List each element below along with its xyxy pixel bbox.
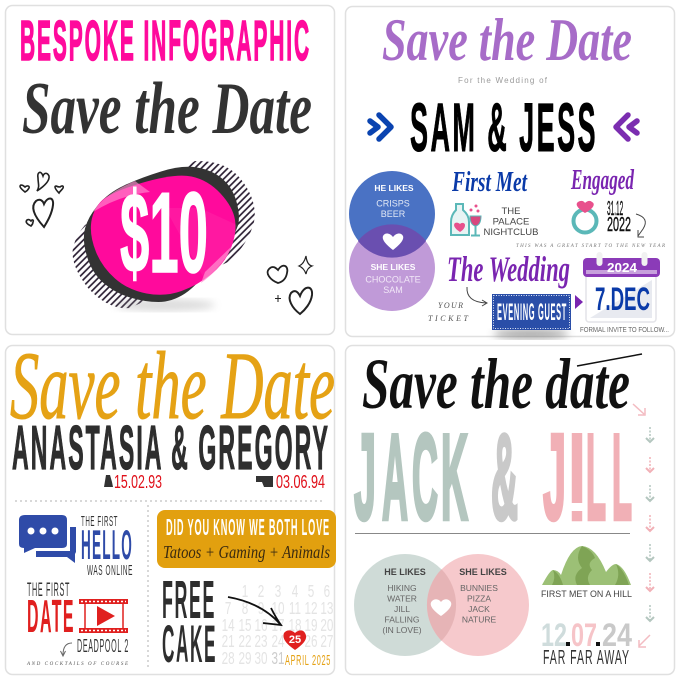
text: first met on a hill: FIRST MET ON A HILL: [541, 589, 632, 599]
icon: hills: [542, 546, 631, 585]
list: he likes: JILL: [394, 604, 410, 614]
label: he likes: HE LIKES: [384, 567, 426, 577]
calendar numbers: 21: [222, 632, 235, 652]
arrow: note: [636, 214, 645, 237]
text: engagement date: 2022: [607, 214, 631, 236]
icon: date heart: 25: [289, 634, 301, 646]
text: cocktails note: AND COCKTAILS OF COURSE: [26, 662, 128, 667]
calendar numbers: 5: [308, 582, 314, 602]
script title: save the date gold: Save the Date: [10, 332, 335, 439]
calendar numbers: [222, 582, 333, 669]
heading: jack: A: [382, 409, 408, 545]
icon: state silhouette right: [256, 476, 273, 487]
panel: jack and jill: [346, 344, 674, 674]
calendar numbers: 4: [292, 582, 298, 602]
text: ticket: TICKET: [428, 314, 469, 323]
callout: both love: [157, 510, 336, 568]
calendar numbers: 24: [271, 632, 285, 652]
panel: anastasia and gregory: [6, 332, 336, 674]
panel: sam and jess: 31.12: [607, 198, 657, 220]
calendar numbers: 28: [222, 649, 235, 669]
icon: doodle hearts right: [268, 256, 312, 314]
calendar numbers: 14: [222, 616, 235, 636]
panel: anastasia and gregory: CAKE: [162, 615, 217, 674]
icon: chat bubbles: [19, 515, 76, 563]
panel: anastasia and gregory: THE FIRST: [27, 580, 70, 601]
calendar numbers: 27: [320, 632, 333, 652]
text: date right: 03.06.94: [276, 472, 325, 492]
heading: jack: J: [354, 409, 376, 545]
icon: ring: [574, 201, 596, 232]
list: she likes: BUNNIES: [460, 583, 498, 593]
panel: anastasia and gregory: WAS ONLINE: [87, 562, 133, 579]
icon: date heart: [283, 630, 306, 650]
calendar: 2024: [607, 260, 638, 275]
calendar numbers: 18: [288, 616, 301, 636]
arrow: to ticket: [467, 287, 487, 306]
icon: blue chevrons: [370, 115, 391, 139]
arrows: dashed column: [633, 404, 654, 647]
list: she likes: NATURE: [462, 614, 496, 624]
panel: anastasia and gregory: HELLO: [81, 521, 133, 568]
text: wedding date: 07: [571, 617, 597, 653]
calendar numbers: 17: [271, 616, 285, 636]
calendar numbers: 20: [320, 616, 333, 636]
icon: white heart: [431, 599, 451, 616]
heading: engaged: Engaged: [570, 165, 635, 196]
icon: purple chevrons: [616, 115, 637, 139]
list: he likes: WATER: [387, 594, 417, 604]
callout: both love: Tatoos + Gaming + Animals: [163, 542, 330, 562]
calendar numbers: 23: [254, 632, 267, 652]
heading: jack: C: [412, 409, 438, 545]
text: venue: THE: [502, 206, 520, 217]
text: wedding date: [541, 617, 632, 653]
list: he likes: CRISPS: [376, 198, 410, 208]
text: wedding date: 24: [602, 617, 632, 653]
label: she likes: SHE LIKES: [459, 567, 507, 577]
calendar numbers: 3: [275, 582, 281, 602]
price badge: $10: [120, 170, 208, 297]
list: she likes: SAM: [383, 285, 403, 295]
calendar numbers: 22: [239, 632, 252, 652]
calendar numbers: 11: [289, 599, 301, 619]
calendar numbers: 15: [239, 616, 252, 636]
list: he likes: FALLING: [385, 614, 419, 624]
heading: first met: First Met: [451, 167, 528, 198]
subtitle: For the Wedding of: [458, 76, 548, 85]
venn diagram: likes: [354, 554, 529, 656]
panel: jack and jill: &: [491, 409, 518, 545]
price badge: [73, 161, 255, 311]
panel: bespoke infographic price: [6, 6, 334, 334]
list: she likes: PIZZA: [467, 594, 491, 604]
heading: jill: J: [543, 409, 566, 545]
calendar numbers: 13: [320, 599, 333, 619]
arrow: to note: [60, 643, 72, 656]
venn diagram: likes: [349, 171, 435, 311]
calendar numbers: 8: [242, 599, 248, 619]
calendar numbers: 12: [305, 599, 318, 619]
calendar numbers: 9: [258, 599, 264, 619]
panel: anastasia and gregory: THE FIRST: [81, 513, 118, 530]
heading: jill: I: [569, 409, 585, 545]
text: DID YOU KNOW WE BOTH LOVE: [166, 514, 330, 540]
ticket: [492, 294, 571, 339]
calendar numbers: 26: [305, 632, 318, 652]
icon: wine bottle and glass: [451, 204, 481, 236]
text: wedding date: 12: [541, 617, 567, 653]
calendar numbers: 2: [258, 582, 264, 602]
icon: doodle hearts left: [20, 172, 63, 227]
calendar numbers: 29: [239, 649, 252, 669]
text: handwritten note: THIS WAS A GREAT START TO THE NEW YEAR: [516, 244, 665, 249]
list: he likes: BEER: [381, 209, 406, 219]
script title: save the date: Save the Date: [22, 68, 312, 150]
calendar numbers: 7: [225, 599, 231, 619]
calendar numbers: 16: [254, 616, 267, 636]
icon: white heart: [383, 233, 403, 250]
heading: the wedding: The Wedding: [447, 249, 570, 289]
panel: anastasia and gregory: DEADPOOL 2: [77, 636, 129, 656]
panel: sam and jess: [346, 6, 674, 339]
panel: anastasia and gregory: DATE: [27, 590, 75, 642]
text: your ticket: YOUR: [438, 301, 463, 310]
icon: state silhouette left: [104, 475, 113, 487]
calendar: [583, 252, 660, 322]
calendar numbers: 10: [271, 599, 285, 619]
panel: anastasia and gregory: APRIL 2025: [285, 652, 331, 669]
calendar numbers: 6: [324, 582, 330, 602]
text: date left: 15.02.93: [114, 472, 162, 492]
arrow: to date: [228, 597, 281, 625]
panel: anastasia and gregory: FREE: [162, 570, 216, 630]
list: he likes: HIKING: [387, 583, 417, 593]
text: formal invite: FORMAL INVITE TO FOLLOW...: [580, 327, 669, 334]
list: he likes: (IN LOVE): [382, 625, 422, 635]
heading: jill: L: [586, 409, 606, 545]
calendar numbers: 19: [305, 616, 318, 636]
text: venue: PALACE: [493, 216, 529, 228]
list: she likes: CHOCOLATE: [365, 274, 421, 284]
calendar numbers: 31: [271, 649, 285, 669]
calendar numbers: 30: [254, 649, 267, 669]
icon: film strip: [79, 599, 128, 633]
panel: jack and jill: K: [441, 409, 468, 545]
list: she likes: JACK: [468, 604, 490, 614]
label: she likes: SHE LIKES: [371, 262, 416, 272]
label: he likes: HE LIKES: [374, 183, 414, 193]
calendar numbers: 1: [242, 582, 248, 602]
arrow: triangle: [575, 295, 583, 309]
text: venue: NIGHTCLUB: [484, 227, 538, 238]
